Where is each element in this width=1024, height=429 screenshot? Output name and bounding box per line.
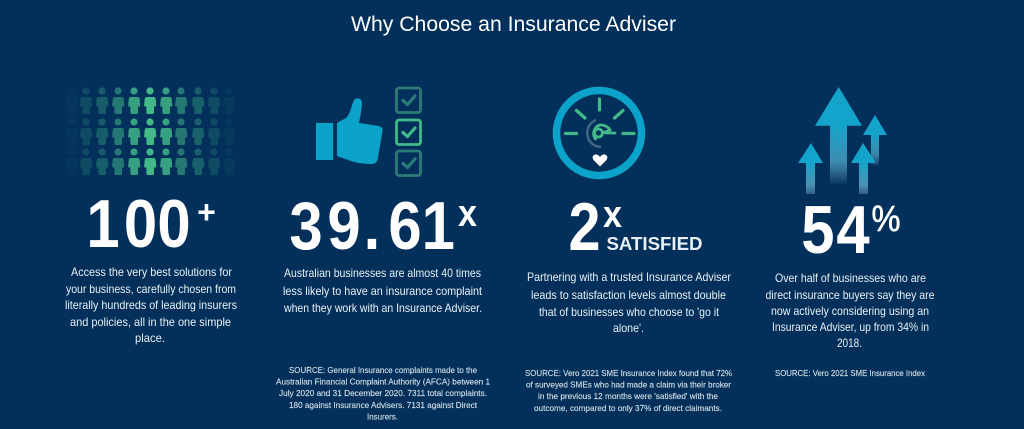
text: 39.61x description: when they work with an Insurance Adviser. xyxy=(283,301,482,315)
statistic: 2x satisfied: SATISFIED xyxy=(606,234,703,254)
text: 2x description: alone'. xyxy=(613,321,644,335)
source: 2x: SOURCE: Vero 2021 SME Insurance Index found that 72% xyxy=(525,368,733,378)
source: 39.61x: Insurers. xyxy=(367,412,398,422)
source: 2x: outcome, compared to only 37% of direct claimants. xyxy=(534,403,722,413)
icon: rising arrows xyxy=(798,87,887,194)
text: 39.61x description: Australian businesses are almost 40 times xyxy=(284,266,481,280)
text: 54% description: Insurance Adviser, up from 34% in xyxy=(772,320,929,334)
source: 39.61x xyxy=(276,365,490,422)
text: 2x description: leads to satisfaction levels almost double xyxy=(531,288,726,302)
text: 2x description xyxy=(527,270,731,335)
text: 39.61x description xyxy=(283,266,483,315)
text: 2x description: that of businesses who choose to 'go it xyxy=(539,305,720,319)
statistic: 100+: + xyxy=(197,194,216,230)
icon: thumbs up xyxy=(316,98,383,164)
text: 100+ description xyxy=(65,265,237,345)
panel: 2x satisfied xyxy=(525,90,733,413)
text: 54% description: 2018. xyxy=(837,336,862,350)
source: 2x xyxy=(525,368,733,413)
source: 39.61x: 180 against Insurance Advisers. 7131 against Direct xyxy=(289,400,478,410)
text: 54% description: Over half of businesses who are xyxy=(775,271,926,285)
text: 54% description: direct insurance buyers say they are xyxy=(766,288,935,302)
statistic: 2x satisfied: x xyxy=(603,194,622,236)
text: 54% description xyxy=(766,271,935,350)
panel: 54% considering an adviser xyxy=(766,87,935,378)
text: 100+ description: and policies, all in the one simple xyxy=(70,315,231,329)
text: 100+ description: Access the very best solutions for xyxy=(71,265,232,279)
statistic: 54% xyxy=(801,191,900,268)
icon: checklist xyxy=(396,88,420,176)
statistic: 2x satisfied xyxy=(568,189,703,265)
source: 39.61x: SOURCE: General Insurance complaints made to the xyxy=(289,365,477,375)
source: 2x: in the previous 12 months were 'satisfied' with the xyxy=(538,391,718,401)
statistic: 2x satisfied: 2 xyxy=(568,189,600,265)
source: 54%: SOURCE: Vero 2021 SME Insurance Index xyxy=(775,368,926,378)
panel: 100+ insurers xyxy=(65,87,237,345)
statistic: 39.61x: x xyxy=(458,193,477,235)
source: 39.61x: July 2020 and 31 December 2020. 7311 total complaints. xyxy=(279,388,487,398)
source: 2x: of surveyed SMEs who had made a claim via their broker xyxy=(526,380,731,390)
icon: people grid xyxy=(66,87,235,175)
source: 39.61x: Australian Financial Complaint Authority (AFCA) between 1 xyxy=(276,376,490,386)
text: 39.61x description: less likely to have an insurance complaint xyxy=(283,284,483,298)
text: 100+ description: place. xyxy=(135,331,165,345)
statistic: 54%: 54 xyxy=(801,191,870,268)
text: 100+ description: your business, carefully chosen from xyxy=(66,282,236,296)
panel: 39.61x fewer complaints xyxy=(276,88,490,422)
text: 100+ description: literally hundreds of leading insurers xyxy=(65,298,237,312)
statistic: 54%: % xyxy=(872,198,900,239)
text: 54% description: now actively considering using an xyxy=(771,304,929,318)
statistic: 100+: 100 xyxy=(86,185,191,262)
statistic: 39.61x: 39.61 xyxy=(289,187,455,264)
text: 2x description: Partnering with a trusted Insurance Adviser xyxy=(527,270,731,284)
title: Why Choose an Insurance Adviser xyxy=(351,12,676,36)
icon: satisfaction gauge xyxy=(556,90,642,176)
